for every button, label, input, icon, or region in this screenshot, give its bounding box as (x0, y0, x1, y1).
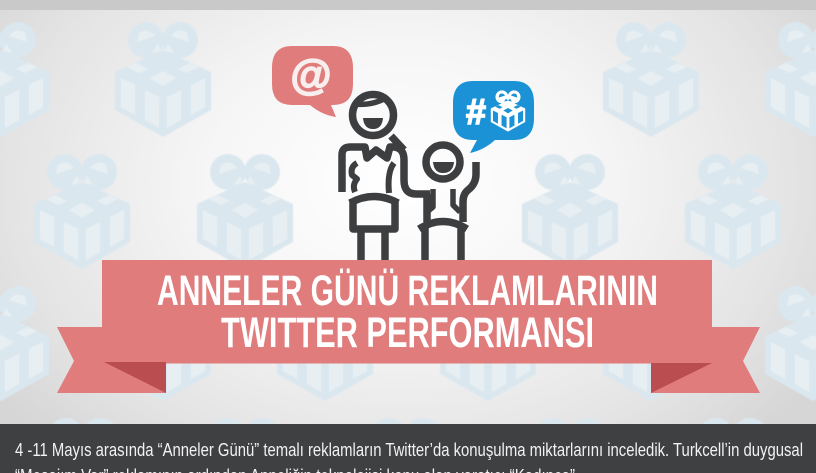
speech bubble: at sign (272, 46, 353, 117)
speech bubble: hashtag and gift (453, 81, 534, 153)
speech bubble: at sign: @ (291, 51, 331, 98)
title (157, 267, 658, 357)
figure: child (419, 145, 476, 260)
ribbon banner (57, 260, 760, 393)
description panel (0, 424, 816, 473)
speech bubble: hashtag and gift: # (466, 91, 486, 132)
title: TWITTER PERFORMANSI (221, 309, 594, 357)
figure: mother (342, 94, 430, 260)
